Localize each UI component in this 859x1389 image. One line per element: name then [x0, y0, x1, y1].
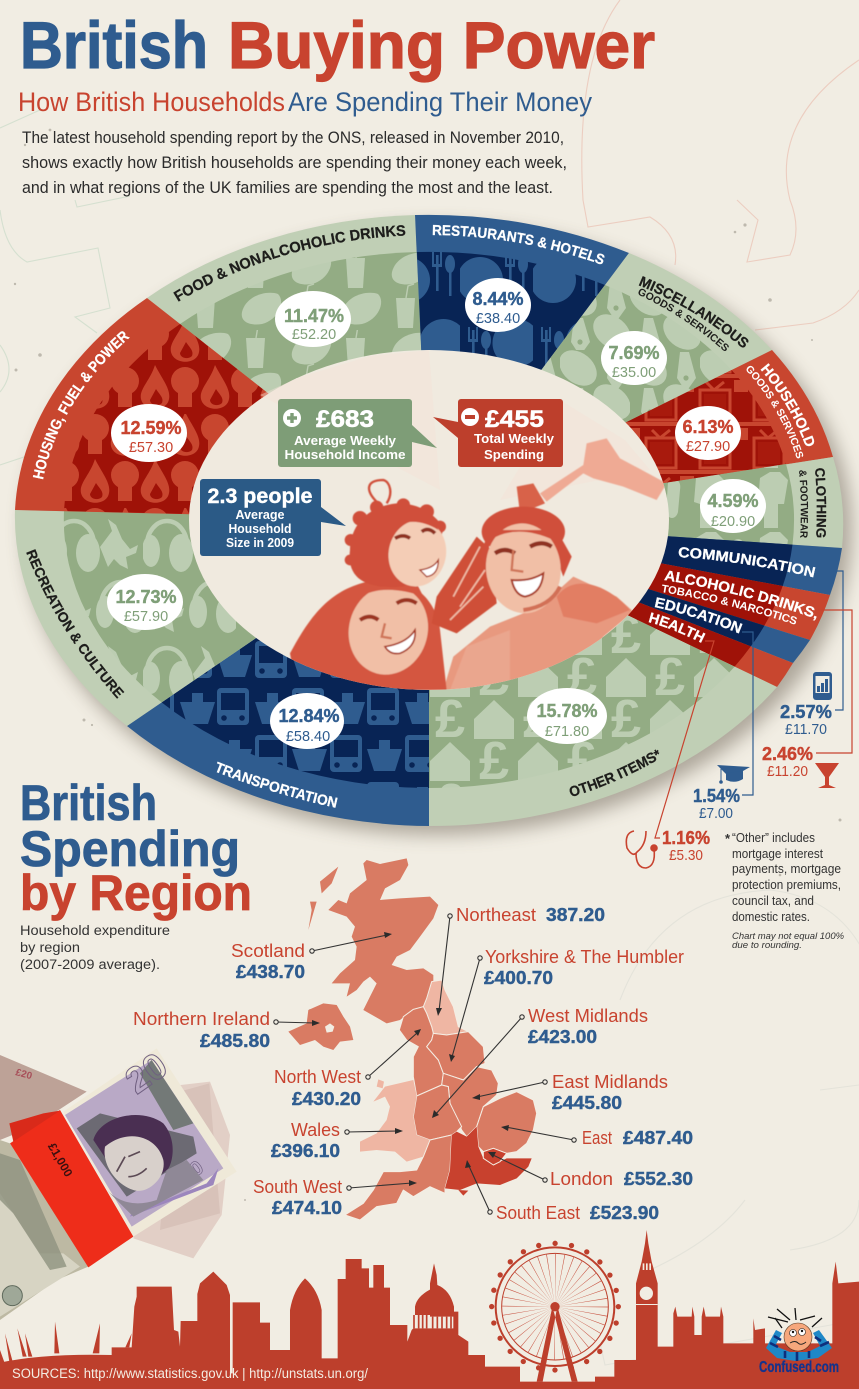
ring labels: OTHER ITEMS*: [570, 750, 660, 796]
stat: health: £5.30: [669, 848, 703, 864]
minus icon: [461, 408, 479, 426]
ring labels: GOODS & SERVICES: [638, 288, 729, 351]
icon: mortarboard: [717, 765, 750, 784]
stat: communication: [780, 571, 843, 738]
banknotes: [0, 1045, 237, 1320]
percent badge: restaurants: 8.44%: [472, 289, 524, 309]
percent badge: housing: £57.30: [129, 440, 173, 456]
banknotes: £20: [14, 1067, 34, 1082]
percent badge: other: £71.80: [545, 724, 589, 740]
region label: South East: £523.90: [590, 1202, 659, 1223]
region label: West Midlands: £423.00: [528, 1026, 597, 1047]
region label: South West: South West: [253, 1176, 342, 1197]
ring labels: HOUSING, FUEL & POWER: [32, 331, 130, 480]
intro paragraph: shows exactly how British households are spending their money each week,: [22, 154, 567, 172]
region: South West: [345, 1135, 452, 1220]
footnote: due to rounding.: [732, 940, 802, 950]
region label: East: £487.40: [623, 1127, 693, 1148]
callout: household size: Household: [228, 522, 292, 536]
ring labels: CLOTHING: [815, 468, 826, 538]
ring labels: GOODS & SERVICES: [746, 366, 804, 458]
region label: Scotland: £438.70: [236, 961, 305, 982]
percent badge: transport: [270, 693, 344, 749]
region label: South East: South East: [496, 1202, 580, 1223]
callout: weekly spending: £455: [485, 406, 544, 433]
banknotes: 20: [118, 1045, 175, 1102]
percent badge: housing: 12.59%: [120, 418, 182, 438]
ring labels: RESTAURANTS & HOTELS: [432, 224, 604, 264]
UK map: [288, 858, 537, 1220]
region label: East: East: [582, 1127, 612, 1148]
callout: weekly spending: [433, 399, 563, 467]
stat: education: 1.54%: [693, 786, 740, 806]
percent badge: transport: £58.40: [286, 729, 330, 745]
region label: Scotland: [231, 940, 305, 982]
wheel shadow: [24, 225, 852, 835]
region label: Northern Ireland: [133, 1008, 270, 1051]
region label: Yorkshire: Yorkshire & The Humbler: [485, 946, 684, 967]
ring labels: MISCELLANEOUS: [638, 276, 748, 348]
London Eye: [492, 1243, 618, 1382]
percent badge: household: [675, 406, 741, 460]
footnote: [725, 831, 844, 950]
percent badge: housing: [111, 404, 187, 462]
percent badge: household: 6.13%: [682, 417, 734, 437]
section heading: by Region: [20, 865, 252, 921]
segment: household goods: [429, 350, 833, 520]
percent badge: household: £27.90: [686, 439, 730, 455]
sources: SOURCES: http://www.statistics.gov.uk | http://unstats.un.org/: [12, 1366, 368, 1381]
section description: Household expenditure: [20, 923, 170, 938]
ring labels: [26, 224, 826, 808]
region label: Yorkshire: [484, 946, 684, 988]
ring labels: TRANSPORTATION: [216, 762, 338, 808]
segment: health: [429, 520, 793, 687]
region: Yorkshire: [427, 1032, 485, 1080]
percent badge: other: [527, 688, 607, 744]
ring labels: RECREATION & CULTURE: [26, 549, 124, 699]
intro paragraph: The latest household spending report by the ONS, released in November 2010,: [22, 129, 564, 147]
region label: Northeast: Northeast: [456, 904, 536, 925]
region: North East: [423, 980, 468, 1035]
region label: South West: [253, 1176, 342, 1218]
region label: West Midlands: [528, 1005, 648, 1047]
segment: food and drinks: [147, 215, 429, 520]
region label: Northeast: [456, 904, 605, 925]
ring labels: & FOOTWEAR: [799, 470, 808, 538]
callout: household size: [200, 479, 346, 556]
region label: North West: North West: [274, 1066, 361, 1087]
segment: education: [429, 520, 810, 663]
callout: weekly income: £683: [316, 406, 374, 433]
region label: North West: £430.20: [292, 1088, 361, 1109]
percent badge: miscellaneous: 7.69%: [608, 343, 660, 363]
callout: weekly income: [278, 399, 437, 467]
intro paragraph: and in what regions of the UK families are spending the most and the least.: [22, 179, 553, 197]
region: Northern Ireland: [288, 1003, 353, 1050]
stat: alcohol: 2.46%: [762, 744, 813, 764]
segment: restaurants: [415, 215, 629, 520]
callout: household size: Size in 2009: [226, 536, 294, 550]
region label: Northern Ireland: £485.80: [200, 1030, 270, 1051]
section heading: British: [20, 775, 157, 831]
region label: East Midlands: [552, 1071, 668, 1113]
segment: alcoholic drinks: [429, 520, 830, 640]
banknotes: £1,000: [45, 1140, 76, 1180]
stat: communication: £11.70: [785, 722, 827, 738]
section description: [20, 923, 170, 972]
footnote: protection premiums,: [732, 878, 841, 892]
region: West Midlands: [413, 1085, 462, 1140]
ring labels: ALCOHOLIC DRINKS,: [664, 570, 817, 621]
region: Scotland: [308, 858, 438, 1023]
title: British: [20, 8, 208, 82]
ring labels: HEALTH: [648, 612, 706, 643]
callout: weekly income: Average Weekly: [294, 434, 396, 448]
percent badge: food: [275, 291, 351, 347]
section heading: Spending: [20, 821, 240, 877]
footnote: domestic rates.: [732, 910, 810, 924]
segment: recreation: [15, 510, 429, 726]
callout: household size: Average: [236, 508, 285, 522]
segment: transportation: [127, 520, 429, 826]
region: London: [483, 1148, 507, 1165]
footnote: mortgage interest: [732, 847, 823, 861]
footnote: *: [725, 831, 731, 846]
segment: housing: [15, 298, 429, 520]
region label: North West: [274, 1066, 361, 1109]
percent badge: miscellaneous: £35.00: [612, 365, 656, 381]
callout: household size: 2.3 people: [208, 485, 312, 508]
region: East: [477, 1092, 537, 1153]
region label: London: [550, 1168, 693, 1189]
stat: education: [693, 632, 753, 822]
segment: clothing: [429, 457, 843, 548]
region: North West: [399, 1007, 443, 1096]
region label: South East: [496, 1202, 659, 1223]
percent badge: miscellaneous: [601, 331, 667, 385]
region label: South West: £474.10: [272, 1197, 342, 1218]
region label: London: London: [550, 1168, 613, 1189]
centre oval: [189, 350, 669, 690]
region label: Wales: [271, 1119, 340, 1161]
subtitle: Are Spending Their Money: [288, 87, 592, 117]
stat: alcohol: [762, 610, 852, 788]
stat: education: £7.00: [699, 806, 733, 822]
ring labels: FOOD & NONALCOHOLIC DRINKS: [173, 225, 406, 302]
region label: East Midlands: £445.80: [552, 1092, 622, 1113]
segment: communication: [429, 520, 842, 595]
ring labels: TOBACCO & NARCOTICS: [662, 584, 797, 624]
section description: (2007-2009 average).: [20, 957, 160, 972]
family photo: [290, 438, 667, 690]
banknotes: 20: [177, 1157, 208, 1187]
region label: Northern Ireland: Northern Ireland: [133, 1008, 270, 1029]
callout: weekly income: Household Income: [284, 448, 406, 462]
footnote: Chart may not equal 100%: [732, 931, 844, 941]
footnote: council tax, and: [732, 894, 814, 908]
percent badge: recreation: £57.90: [124, 609, 168, 625]
percent badge: food: £52.20: [292, 327, 336, 343]
map connectors: [274, 914, 576, 1214]
subtitle: [18, 87, 592, 117]
percent badge: recreation: [107, 574, 183, 630]
ring labels: EDUCATION: [654, 597, 742, 634]
region: Wales: [360, 1079, 430, 1162]
intro paragraph: [22, 129, 567, 197]
skyline: right: [430, 1230, 859, 1389]
region label: Wales: £396.10: [271, 1140, 340, 1161]
region label: Northeast: 387.20: [546, 904, 605, 925]
callout: weekly spending: Total Weekly: [474, 432, 554, 446]
section description: by region: [20, 940, 80, 955]
title: [20, 8, 655, 82]
icon: phone: [813, 672, 832, 700]
percent badge: recreation: 12.73%: [115, 587, 177, 607]
percent badge: restaurants: [465, 278, 531, 332]
region label: London: £552.30: [624, 1168, 693, 1189]
callout: weekly spending: Spending: [484, 448, 544, 462]
stat: health: 1.16%: [662, 828, 710, 848]
percent badge: food: 11.47%: [284, 306, 344, 326]
footnote: “Other” includes: [732, 831, 815, 845]
percent badge: transport: 12.84%: [278, 706, 340, 726]
region label: Yorkshire: £400.70: [484, 967, 553, 988]
stat: alcohol: £11.20: [767, 764, 808, 780]
icon: cocktail glass: [815, 763, 839, 788]
title: Buying Power: [228, 8, 655, 82]
percent badge: restaurants: £38.40: [476, 311, 520, 327]
London skyline: [0, 1230, 859, 1389]
section heading: [20, 775, 252, 921]
region: East Midlands: [442, 1067, 498, 1137]
footnote: payments, mortgage: [732, 862, 841, 876]
segment: miscellaneous: [429, 253, 772, 520]
region: South East: [445, 1127, 532, 1196]
region label: West Midlands: West Midlands: [528, 1005, 648, 1026]
subtitle: How British Households: [18, 87, 285, 117]
logo: Confused.com: [759, 1308, 839, 1376]
ring labels: COMMUNICATION: [678, 547, 816, 578]
stat: health: [626, 641, 714, 868]
skyline: left: [0, 1259, 430, 1389]
percent badge: clothing: £20.90: [711, 514, 755, 530]
percent badge: clothing: [700, 479, 766, 533]
percent badge: other: 15.78%: [536, 701, 598, 721]
region label: East: [582, 1127, 693, 1148]
stat: communication: 2.57%: [780, 702, 832, 722]
plus icon: [283, 409, 301, 427]
region label: Scotland: Scotland: [231, 940, 305, 961]
percent badge: clothing: 4.59%: [707, 491, 759, 511]
icon: stethoscope: [626, 831, 657, 868]
ring labels: HOUSEHOLD: [760, 363, 814, 446]
segment: other items: [429, 520, 777, 826]
region label: Wales: Wales: [291, 1119, 340, 1140]
region label: East Midlands: East Midlands: [552, 1071, 668, 1092]
